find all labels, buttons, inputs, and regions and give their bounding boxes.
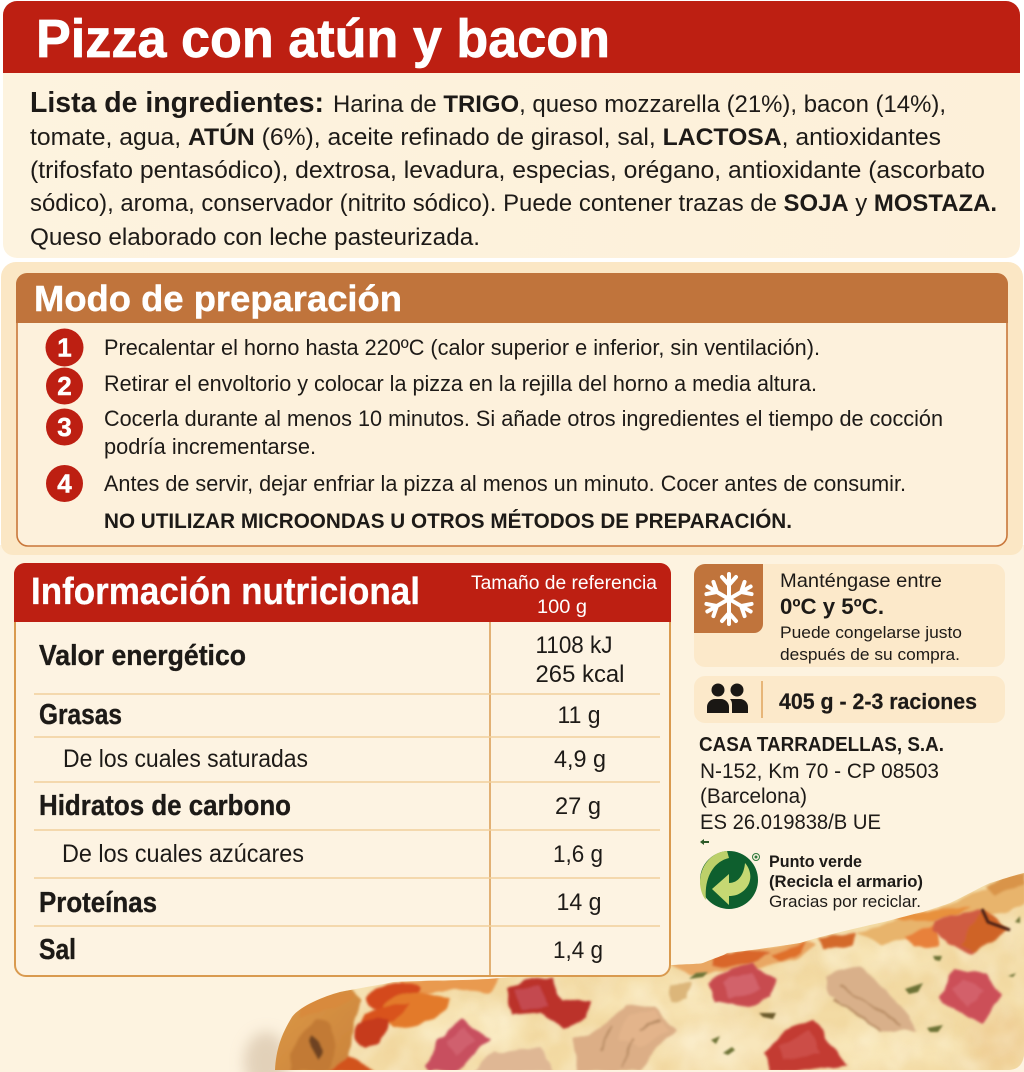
row: salt: 1,4 g	[553, 937, 603, 964]
ingredients text: Harina de TRIGO, queso mozzarella (21%), bacon (14%),	[333, 91, 946, 118]
tomato sauce	[353, 984, 448, 1048]
row: energy: 1108 kJ	[536, 632, 612, 659]
row: sugars	[62, 840, 603, 868]
recycling text: Gracias por reciclar.	[769, 892, 921, 911]
row: sugars: 1,6 g	[553, 841, 603, 868]
row: saturated: 4,9 g	[554, 746, 606, 773]
recycling text	[769, 853, 923, 911]
preparation header: Modo de preparación	[34, 278, 402, 319]
row: carbohydrates: 27 g	[555, 793, 601, 820]
step 1: 1	[57, 332, 72, 362]
company address	[699, 733, 944, 834]
step 1	[46, 328, 820, 366]
title banner	[3, 1, 1020, 73]
warning text: NO UTILIZAR MICROONDAS U OTROS MÉTODOS DE PREPARACIÓN.	[104, 509, 792, 533]
page background	[0, 545, 1024, 1072]
ingredients text: (trifosfato pentasódico), dextrosa, levadura, especias, orégano, antioxidante (ascorbato	[30, 157, 985, 184]
pizza photo	[244, 870, 1024, 1072]
storage text: Manténgase entre	[780, 570, 942, 592]
preparation header	[16, 273, 1008, 323]
storage text: después de su compra.	[780, 645, 960, 664]
herbs	[689, 916, 1020, 1055]
nutrition header: 100 g	[537, 597, 587, 618]
step 2: Retirar el envoltorio y colocar la pizza en la rejilla del horno a media altura.	[104, 371, 817, 396]
cheese highlights	[415, 1005, 525, 1055]
nutrition header	[14, 563, 671, 622]
company address: (Barcelona)	[700, 785, 807, 808]
row: fat: Grasas	[39, 699, 122, 731]
tuna flakes	[470, 967, 917, 1072]
step 4	[46, 465, 906, 502]
servings text: 405 g - 2-3 raciones	[779, 689, 977, 714]
row: sugars: De los cuales azúcares	[62, 840, 304, 868]
nutrition header: Información nutricional	[31, 571, 420, 613]
step 3: 3	[57, 412, 72, 442]
storage text	[780, 570, 962, 664]
icon: green dot	[700, 851, 760, 909]
burnt bacon edge	[982, 909, 1010, 930]
panel: ingredients	[3, 1, 1020, 258]
crust and rim	[270, 870, 1024, 1072]
title banner: Pizza con atún y bacon	[36, 9, 610, 69]
step 4: Antes de servir, dejar enfriar la pizza al menos un minuto. Cocer antes de consumir.	[104, 471, 906, 496]
row: energy: Valor energético	[39, 640, 246, 672]
step 2	[46, 368, 817, 404]
ingredients text	[30, 87, 997, 251]
step 1: Precalentar el horno hasta 220ºC (calor superior e inferior, sin ventilación).	[104, 335, 820, 360]
row: salt: Sal	[39, 934, 76, 966]
row: salt	[39, 934, 603, 966]
row: energy: 265 kcal	[536, 661, 624, 688]
row: energy	[39, 632, 624, 688]
step 3: Cocerla durante al menos 10 minutos. Si añade otros ingredientes el tiempo de cocción	[104, 406, 943, 431]
nutrition header: Tamaño de referencia	[471, 573, 657, 594]
ingredients text: Queso elaborado con leche pasteurizada.	[30, 224, 480, 251]
panel: servings	[694, 676, 1005, 723]
ingredients text: sódico), aroma, conservador (nitrito sódico). Puede contener trazas de SOJA y MOSTAZA.	[30, 190, 997, 217]
panel: preparation outer	[1, 262, 1023, 555]
icon: snowflake	[694, 564, 763, 633]
row: protein: 14 g	[556, 889, 602, 916]
recycling text: (Recicla el armario)	[769, 873, 923, 891]
row: carbohydrates: Hidratos de carbono	[39, 790, 291, 822]
row: saturated	[63, 745, 606, 773]
icon: people	[707, 684, 748, 713]
row: fat	[39, 699, 600, 731]
panel: storage	[694, 564, 1005, 667]
step 3	[46, 406, 943, 459]
company address: CASA TARRADELLAS, S.A.	[699, 733, 944, 756]
panel: nutrition table	[14, 563, 671, 976]
recycling text: Punto verde	[769, 853, 862, 871]
storage text: Puede congelarse justo	[780, 623, 962, 642]
company address: N-152, Km 70 - CP 08503	[700, 760, 939, 783]
step 4: 4	[57, 468, 72, 498]
row: carbohydrates	[39, 790, 601, 822]
row: protein	[39, 887, 602, 919]
company address: ES 26.019838/B UE	[700, 811, 881, 834]
storage text: 0ºC y 5ºC.	[780, 594, 884, 619]
row: fat: 11 g	[558, 702, 600, 729]
step 2: 2	[57, 371, 72, 401]
ingredients text: Lista de ingredientes:	[30, 87, 324, 119]
step 3: podría incrementarse.	[104, 434, 316, 459]
row: saturated: De los cuales saturadas	[63, 745, 308, 773]
panel: preparation inner	[16, 273, 1008, 546]
row: protein: Proteínas	[39, 887, 157, 919]
bacon pieces	[427, 908, 1010, 1072]
small arrow mark	[700, 839, 709, 845]
ingredients text: tomate, agua, ATÚN (6%), aceite refinado de girasol, sal, LACTOSA, antioxidantes	[30, 123, 941, 151]
